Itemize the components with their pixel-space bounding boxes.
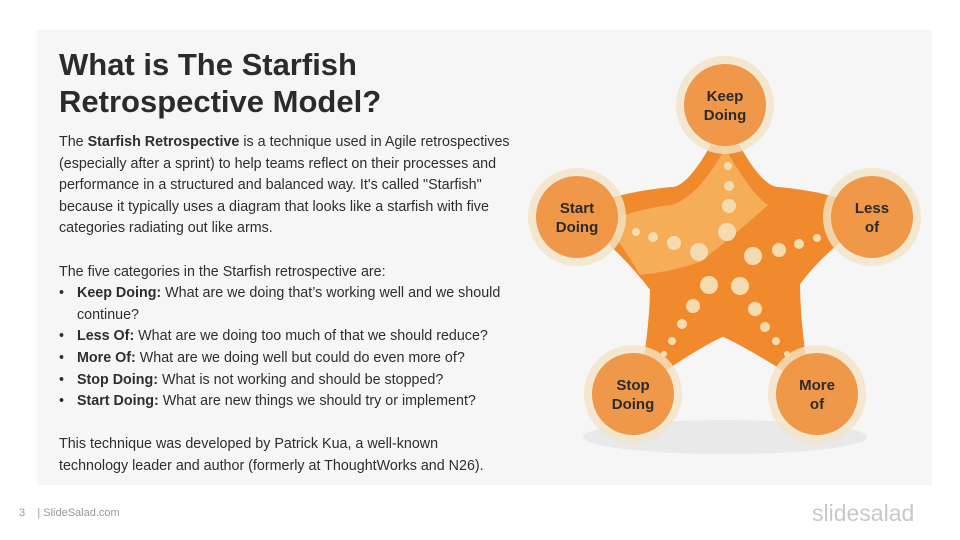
circle: Keep Doing: Doing [704,107,746,124]
circle: More of [768,345,866,443]
circle: Stop Doing: Doing [612,396,654,413]
body text: This technique was developed by Patrick Kua, a well-known [59,436,438,452]
footer: page number: 3 | SlideSalad.com [19,507,120,519]
body text: Stop Doing: What is not working and should be stopped? [77,372,443,388]
circle: More of: More [799,377,835,394]
body text: The five categories in the Starfish retrospective are: [59,264,386,280]
circle: Start Doing [528,168,626,266]
circle: Less of: Less [855,200,889,217]
circle: Start Doing: Start [560,200,594,217]
body text [59,134,510,474]
circle: Keep Doing: Keep [707,88,743,105]
title [59,47,381,119]
circle: Less of [823,168,921,266]
background panel [37,30,932,485]
circle: Less of: of [865,219,880,236]
circle: Stop Doing [584,345,682,443]
circle: Stop Doing: Stop [616,377,650,394]
shadow [583,420,867,454]
body text: Keep Doing: What are we doing that’s working well and we should continue? [77,285,500,323]
title: Retrospective Model? [59,84,381,119]
footer logo: slidesalad [812,500,914,526]
circle: Keep Doing [676,56,774,154]
circle: Start Doing: Doing [556,219,598,236]
body text: The Starfish Retrospective is a technique used in Agile retrospectives (especially after a sprint) to help teams reflect on their processes and performance in a structured and balanced way. It's called "Starfish" because it typically uses a diagram that looks like a starfish with five categories radiating out like arms. [59,134,510,236]
starfish body [588,135,862,372]
body text: Start Doing: What are new things we should try or implement? [77,393,476,409]
title: What is The Starfish [59,47,357,82]
body text: technology leader and author (formerly at ThoughtWorks and N26). [59,458,484,474]
body text: More Of: What are we doing well but could do even more of? [77,350,465,366]
body text: Less Of: What are we doing too much of that we should reduce? [77,328,488,344]
circle: More of: of [810,396,825,413]
